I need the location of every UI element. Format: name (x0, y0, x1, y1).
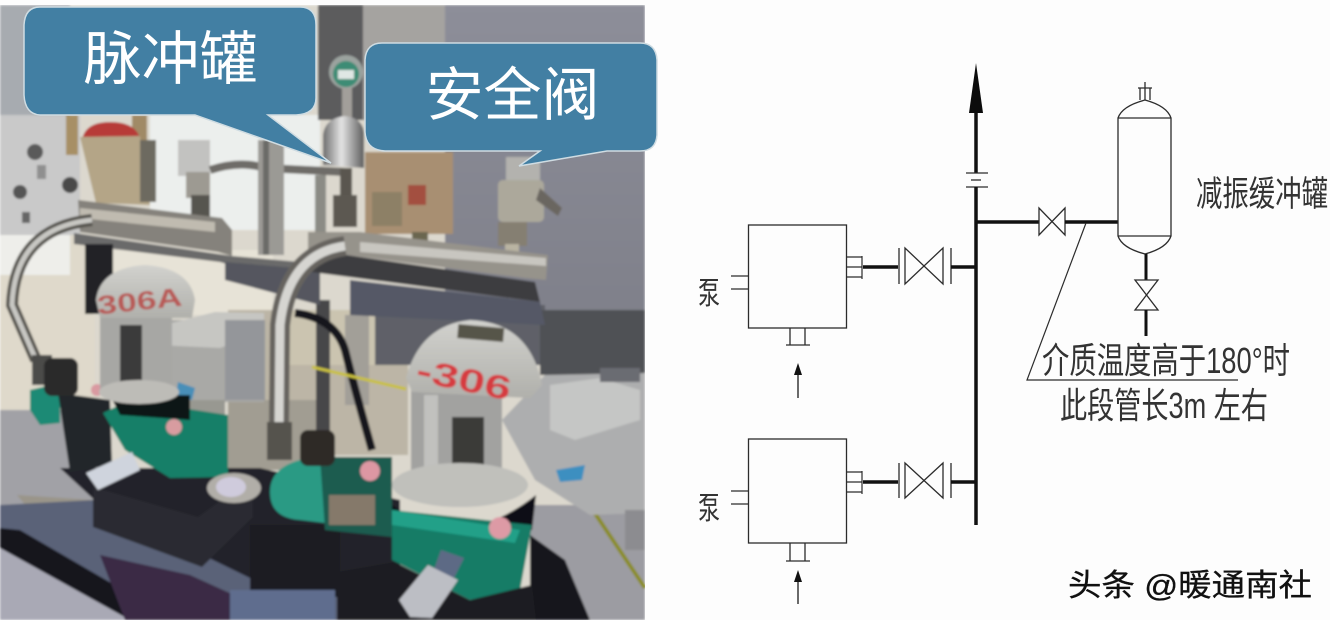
photo: left motor (96, 265, 195, 404)
photo: left pipe fitting (32, 355, 52, 385)
photo: support columns (258, 140, 369, 440)
photo: pressure gauge (329, 55, 363, 118)
photo: right tan box (365, 152, 453, 246)
photo: left tan box with red top (66, 115, 156, 205)
photo: right curved pipe (279, 246, 345, 425)
watermark: 头条 @暖通南社 (1068, 568, 1312, 603)
photo: left control panel knobs (13, 144, 78, 223)
buffer tank (1118, 82, 1171, 254)
panel: pump photo (0, 5, 645, 620)
photo: right base block (337, 562, 536, 620)
callout: pulse tank (24, 7, 331, 163)
photo: right safety valve (498, 157, 562, 258)
floor shapes (0, 410, 100, 510)
photo: left curved pipe (12, 220, 92, 360)
tank drain with valve (1135, 254, 1158, 336)
photo: right motor: -306 (413, 351, 515, 407)
photo: left motor gearbox (171, 312, 266, 416)
photo: right motor gearbox (502, 368, 645, 550)
label: pump 1: 泵 (698, 276, 720, 311)
photo: black hose (295, 313, 372, 450)
watermark: 头条 @暖通南社 (1069, 569, 1313, 604)
label: pump 2: 泵 (698, 491, 720, 526)
photo: left safety valve (178, 140, 210, 217)
photo: left manifold and frame (74, 200, 320, 314)
inlet arrow 2 (794, 570, 802, 604)
main riser with up arrow (966, 63, 988, 525)
photo: right pipe fitting (267, 422, 292, 460)
photo: yellow ground wire (312, 367, 645, 588)
pump 1 (731, 225, 976, 345)
branch to buffer tank with valve (976, 208, 1119, 235)
callout label: 脉冲罐 (83, 27, 258, 92)
photo: right motor (392, 320, 542, 507)
photo: connecting pipe (210, 164, 345, 172)
photo: right green pump (270, 430, 536, 600)
photo: pulse tank (323, 116, 364, 227)
leader line (1027, 223, 1238, 380)
photo: left base block (92, 491, 211, 568)
note: pipe length: 此段管长3m 左右 (1060, 385, 1268, 426)
photo: right manifold and frame (308, 232, 548, 325)
panel: piping schematic (731, 63, 1238, 604)
photo: right handle (399, 550, 464, 618)
inlet arrow 1 (794, 363, 802, 398)
callout label: 安全阀 (425, 63, 600, 128)
photo: small dial (207, 473, 261, 503)
photo: left green pump (30, 358, 228, 478)
photo: left motor: 306A (96, 282, 184, 320)
pump 2 (731, 439, 976, 561)
photo: left handle (86, 452, 140, 490)
callout: safety valve (365, 43, 657, 166)
photo: background wall and floor (0, 5, 645, 620)
